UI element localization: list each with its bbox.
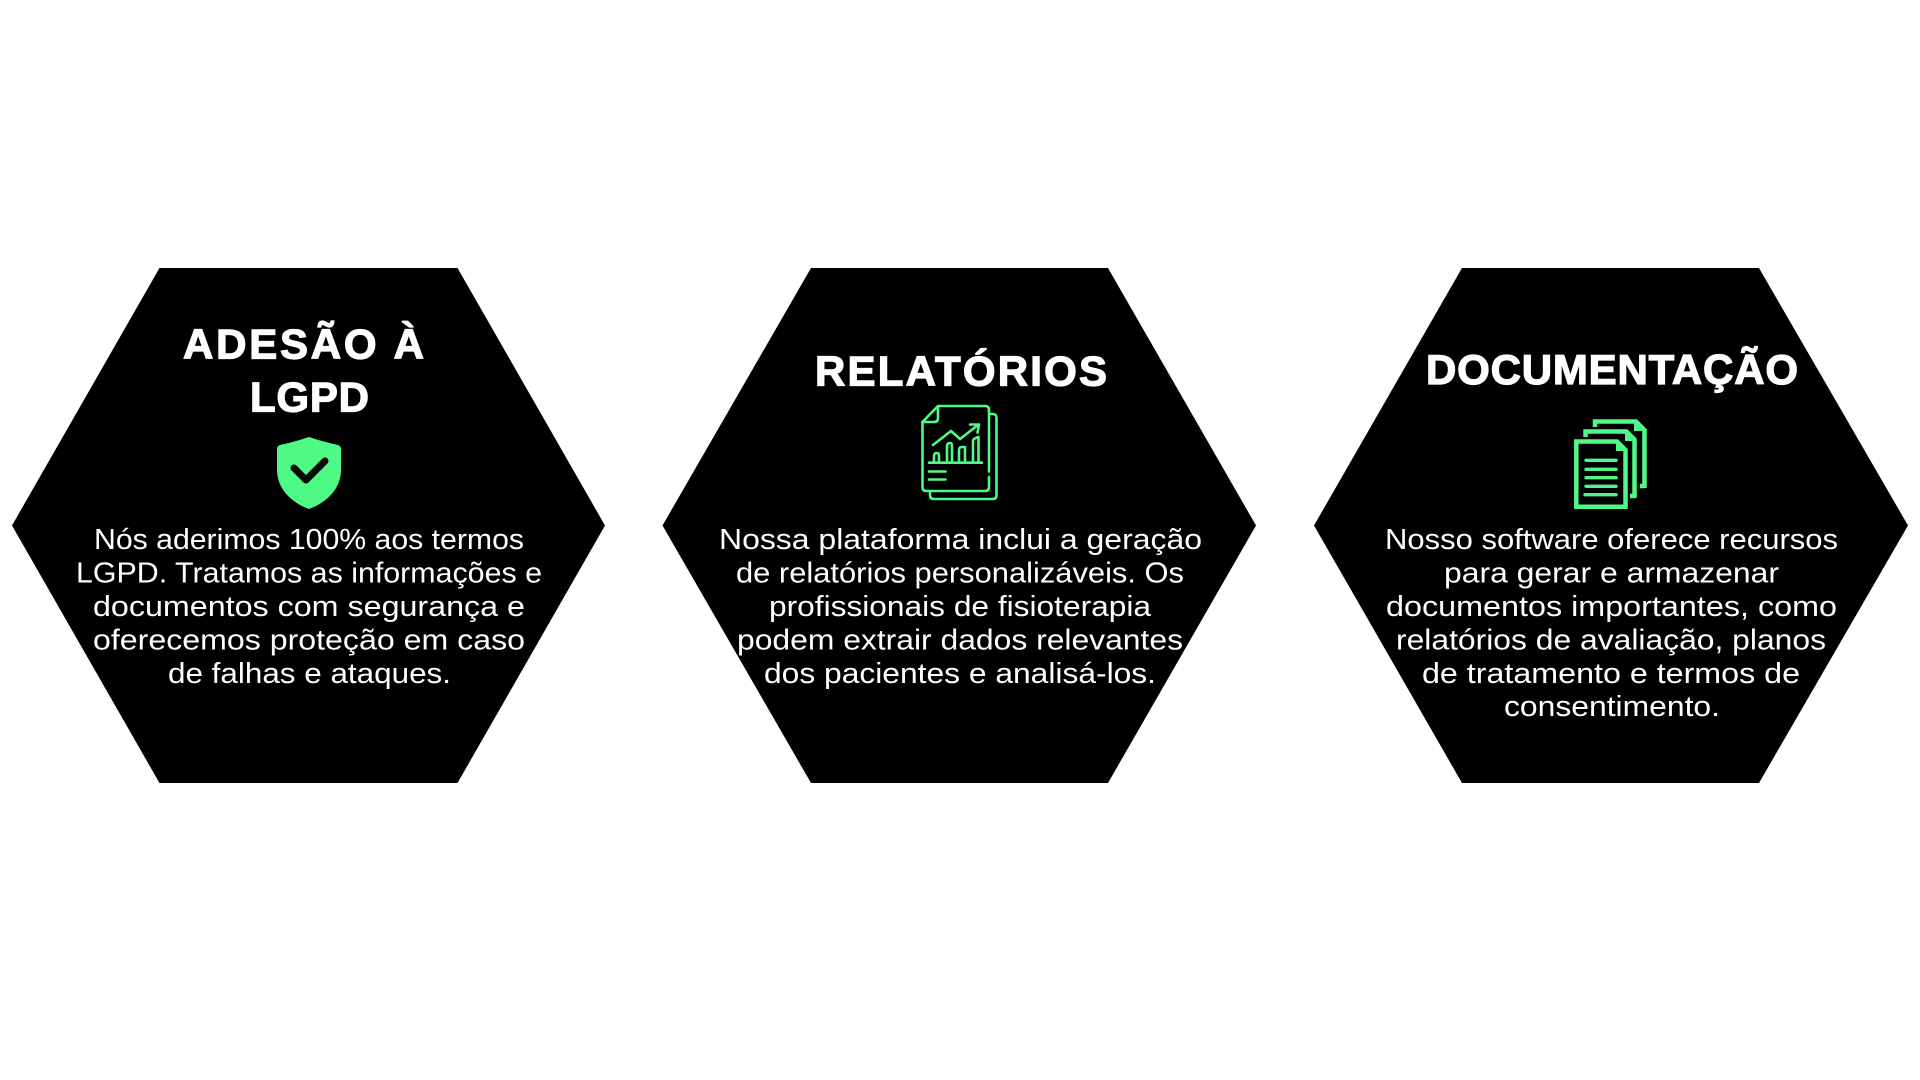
text: relatórios body [719,524,1202,690]
text: relatórios body: profissionais de fisioterapia [769,591,1151,623]
panel: relatórios [662,268,1256,783]
text: relatórios body: Nossa plataforma inclui a geração [719,524,1202,556]
text: relatórios body: dos pacientes e analisá-los. [764,658,1156,690]
text: adesão body: de falhas e ataques. [168,658,451,690]
text: adesão body: LGPD. Tratamos as informações e [76,558,542,590]
text: adesão body: documentos com segurança e [93,591,525,623]
text: documentação body: documentos importantes, como [1386,591,1837,623]
heading: documentação: DOCUMENTAÇÃO [1426,346,1798,393]
text: relatórios body: de relatórios personalizáveis. Os [736,558,1184,590]
text: documentação body [1385,524,1838,723]
text: documentação body: relatórios de avaliação, planos [1396,624,1826,656]
heading: adesão à LGPD: ADESÃO À [183,320,424,368]
text: documentação body: Nosso software oferece recursos [1385,524,1838,556]
icon: stacked documents [1576,420,1646,507]
panel: adesão à LGPD [12,268,605,783]
heading: adesão à LGPD: LGPD [250,374,369,420]
text: documentação body: para gerar e armazenar [1444,558,1780,590]
text: adesão body [76,524,542,690]
text: documentação body: de tratamento e termos de [1422,658,1800,690]
text: adesão body: Nós aderimos 100% aos termos [94,524,524,556]
heading: relatórios: RELATÓRIOS [815,346,1107,394]
text: adesão body: oferecemos proteção em caso [93,624,525,656]
text: relatórios body: podem extrair dados relevantes [737,624,1183,656]
panel: documentação [1314,268,1908,783]
hexagon background 2 [662,268,1256,783]
hexagon background 3 [1314,268,1908,783]
icon: shield with check [277,437,341,509]
hexagon background 1 [12,268,605,783]
text: documentação body: consentimento. [1504,691,1720,723]
heading: adesão à LGPD [183,320,424,420]
icon: report with chart [922,406,996,499]
